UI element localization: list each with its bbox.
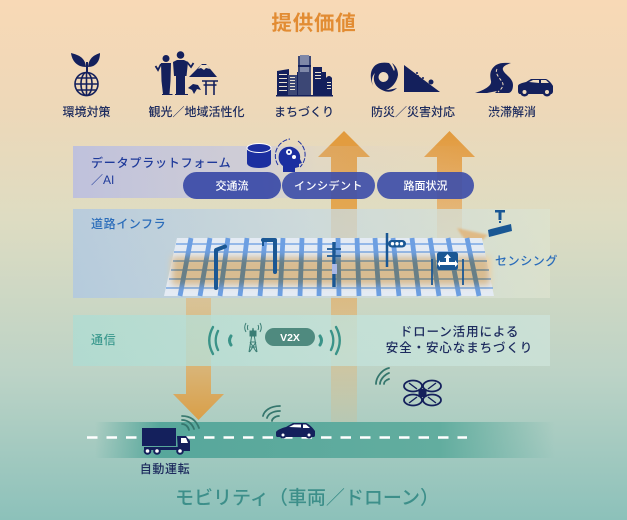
title: 提供価値 (271, 12, 357, 35)
road grid (164, 238, 494, 296)
icon: camera (488, 210, 512, 237)
arrow: up left (318, 131, 370, 425)
road (95, 422, 555, 458)
pill: road conditions: 路面状況 (404, 178, 448, 192)
icon: signal waves left (209, 327, 231, 354)
icon: signal pole (387, 233, 406, 267)
icon: drone (404, 380, 441, 406)
icon: wifi near drone (376, 368, 389, 384)
road dashed line (87, 436, 467, 439)
callout: drone use: ドローン活用による (400, 325, 519, 339)
label: town development: まちづくり (274, 105, 334, 119)
icon: direction sign gantry (432, 252, 463, 285)
icon: database (247, 144, 271, 168)
heading: mobility: モビリティ（車両／ドローン） (175, 487, 439, 509)
icon: pole with overhead arm (263, 240, 275, 272)
icon: wifi near truck (182, 416, 199, 430)
pill: traffic flow: 交通流 (216, 178, 248, 192)
icon: signal waves right (320, 327, 340, 354)
callout: drone use: 安全・安心なまちづくり (386, 340, 533, 355)
label: tourism: 観光／地域活性化 (148, 104, 245, 119)
icon: cyclone and landslide (371, 63, 440, 92)
label: disaster prevention: 防災／災害対応 (371, 104, 455, 119)
label: sensing: センシング (495, 253, 558, 268)
panel: data platform (73, 146, 478, 198)
pill: V2X (265, 328, 315, 346)
label: AI: ／AI (91, 173, 114, 187)
pill: V2X: V2X (280, 332, 300, 344)
label: road infrastructure: 道路インフラ (91, 216, 166, 231)
pill: incident (282, 172, 375, 199)
pill: traffic flow (183, 172, 281, 199)
sensing beam (457, 228, 488, 250)
pill: incident: インシデント (294, 178, 363, 192)
label: environment: 環境対策 (62, 104, 111, 119)
arrow: up right (424, 131, 475, 245)
panel: road infrastructure (73, 209, 550, 298)
icon: car (276, 423, 315, 438)
icon: pole with curved arm (216, 246, 225, 288)
icon: winding road and car (475, 63, 553, 96)
icon: AI head with gears (275, 139, 305, 172)
icon: tourism people and mount fuji (156, 51, 218, 95)
icon: city buildings (276, 55, 333, 96)
icon: radio tower (245, 323, 261, 352)
icon: environment globe with sprout (71, 53, 100, 96)
icon: utility pole (327, 242, 341, 287)
arrow: down (173, 298, 224, 420)
label: automated driving: 自動運転 (140, 461, 190, 476)
label: congestion relief: 渋滞解消 (488, 104, 536, 119)
callout: drone use (386, 325, 533, 355)
pill: road conditions (377, 172, 474, 199)
icon: truck (142, 428, 190, 455)
label: data platform: データプラットフォーム (91, 155, 231, 170)
label: communication: 通信 (91, 332, 116, 347)
panel: communication (73, 315, 550, 366)
icon: wifi near car (263, 406, 280, 421)
